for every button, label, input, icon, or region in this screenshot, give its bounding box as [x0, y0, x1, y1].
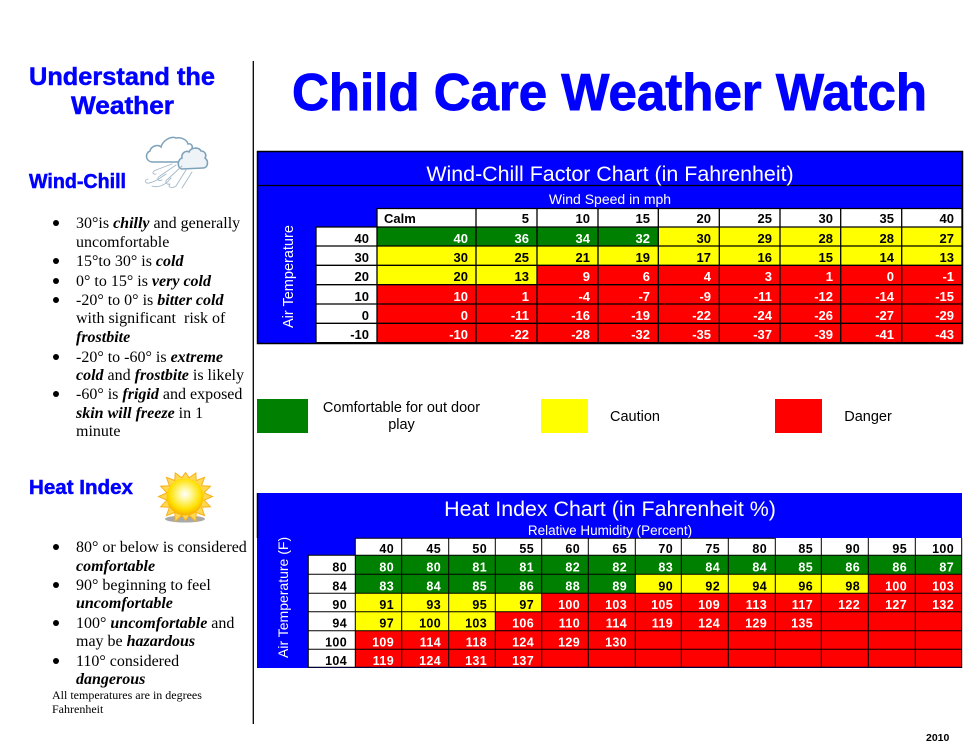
row 90: 93 [426, 598, 441, 612]
row 40: 30 [697, 231, 711, 246]
row 94: 119 [652, 616, 673, 630]
row 80: 80 [426, 560, 441, 574]
relative humidity header row: 85 [798, 542, 813, 556]
legend: comfortable: Comfortable for out door [323, 400, 480, 416]
legend: caution: Caution [610, 409, 660, 425]
wind speed header row: 35 [880, 211, 894, 226]
row 90: 132 [932, 598, 954, 612]
legend: danger [775, 399, 892, 433]
row 104: 137 [512, 654, 534, 668]
row 10: -4 [578, 289, 591, 304]
row 40: 34 [576, 231, 591, 246]
heat index bullet list: may be hazardous [76, 633, 195, 650]
air temperature axis label: Air Temperature [281, 225, 297, 328]
row 0: -29 [935, 308, 954, 323]
row 84: 88 [565, 580, 580, 594]
row 0: -16 [571, 308, 590, 323]
row 80: 86 [892, 560, 907, 574]
row 40: 28 [880, 231, 894, 246]
row 80: 82 [565, 560, 580, 574]
wind-chill bullet list: -20° to 0° is bitter cold [76, 292, 224, 309]
wind-chill bullet list: -20° to -60° is extreme [76, 349, 223, 366]
relative humidity header row: 70 [658, 542, 673, 556]
row 94: 110 [559, 616, 580, 630]
wind speed header row: 15 [636, 211, 650, 226]
row -10: -10 [350, 327, 369, 342]
wind speed header row [384, 211, 954, 226]
row 90: 109 [698, 598, 720, 612]
row 80: 80 [332, 560, 347, 574]
row -10: -41 [875, 327, 894, 342]
wind speed header row: 30 [819, 211, 833, 226]
row 0: -24 [753, 308, 773, 323]
row 20: 20 [454, 269, 468, 284]
cell backgrounds [308, 538, 962, 668]
row 20: -1 [942, 269, 954, 284]
row 90: 122 [838, 598, 860, 612]
icon: wind cloud [145, 137, 207, 188]
row 94 [332, 616, 813, 630]
relative humidity header row: 75 [705, 542, 720, 556]
row 94: 129 [745, 616, 767, 630]
row 0: 0 [362, 308, 369, 323]
row 20 [355, 269, 954, 284]
heat index bullet list: 80° or below is considered [76, 539, 247, 556]
row 100: 130 [605, 636, 627, 650]
row 30: 17 [697, 250, 711, 265]
year label: 2010 [926, 732, 950, 744]
wind-chill chart [258, 152, 962, 344]
relative humidity header row: 55 [519, 542, 534, 556]
sidebar heading [29, 63, 215, 120]
row -10: -22 [510, 327, 529, 342]
row 0 [362, 308, 954, 323]
heat index bullet list: 100° uncomfortable and [76, 615, 234, 632]
heat index bullet list: comfortable [76, 558, 155, 575]
wind speed header row: 10 [576, 211, 590, 226]
row 84: 83 [379, 580, 394, 594]
row 90: 105 [651, 598, 673, 612]
row -10: -39 [814, 327, 833, 342]
heat index bullet list: 90° beginning to feel [76, 577, 211, 594]
row 40: 40 [454, 231, 468, 246]
row 30: 30 [454, 250, 468, 265]
row 94: 124 [698, 616, 720, 630]
relative humidity header row: 45 [426, 542, 441, 556]
row 84: 103 [932, 580, 954, 594]
row 90: 95 [472, 598, 487, 612]
row 90: 97 [519, 598, 534, 612]
row 84: 90 [658, 580, 673, 594]
icon: sun [158, 472, 212, 522]
legend: caution [541, 399, 660, 433]
row 10: -12 [814, 289, 833, 304]
row 90: 103 [605, 598, 627, 612]
row 0: -27 [875, 308, 894, 323]
row 10: -15 [935, 289, 954, 304]
relative humidity header row: 100 [932, 542, 954, 556]
row 10: -14 [875, 289, 895, 304]
row 94: 100 [419, 616, 441, 630]
row 80: 84 [705, 560, 720, 574]
row 0: -26 [814, 308, 833, 323]
heat index heading: Heat Index [29, 477, 133, 499]
row 90: 117 [792, 598, 813, 612]
row 40: 40 [355, 231, 369, 246]
row 20: 1 [826, 269, 833, 284]
heat index bullet list: uncomfortable [76, 595, 173, 612]
relative humidity header row: 60 [565, 542, 580, 556]
wind speed header row: 40 [940, 211, 954, 226]
row 40: 27 [940, 231, 954, 246]
row 84: 100 [885, 580, 907, 594]
wind-chill bullet list: 30°is chilly and generally [76, 215, 240, 232]
row 20: 13 [515, 269, 529, 284]
row 84: 84 [332, 580, 347, 594]
wind-chill bullet list: 0° to 15° is very cold [76, 273, 212, 290]
row 80: 81 [472, 560, 487, 574]
row 104 [325, 654, 534, 668]
cell backgrounds [316, 208, 962, 343]
row 80: 85 [798, 560, 813, 574]
row 84: 94 [752, 580, 767, 594]
row 30: 25 [515, 250, 529, 265]
wind-chill bullet list: minute [76, 423, 120, 440]
row 10: 10 [355, 289, 369, 304]
wind-chill bullet list: -60° is frigid and exposed [76, 386, 242, 403]
footnote [52, 688, 202, 716]
relative humidity header row: 95 [892, 542, 907, 556]
wind speed header row: 25 [758, 211, 772, 226]
heat index chart title: Heat Index Chart (in Fahrenheit %) [444, 497, 776, 521]
row 100: 129 [558, 636, 580, 650]
air temperature axis label: Air Temperature (F) [275, 537, 291, 658]
wind speed header row: Calm [384, 211, 416, 226]
row 80: 83 [658, 560, 673, 574]
wind speed header row: 20 [697, 211, 711, 226]
row 10: 1 [522, 289, 529, 304]
row 104: 124 [419, 654, 441, 668]
heat index bullet list: 110° considered [76, 653, 179, 670]
row 0: -11 [511, 308, 529, 323]
footnote: All temperatures are in degrees [52, 688, 202, 702]
row 40: 28 [819, 231, 833, 246]
row 30: 30 [355, 250, 369, 265]
row 84: 89 [612, 580, 627, 594]
row 10: 10 [454, 289, 468, 304]
row 94: 135 [791, 616, 813, 630]
sidebar heading: Understand the [29, 63, 215, 91]
relative humidity axis label: Relative Humidity (Percent) [528, 523, 692, 538]
row 94: 114 [606, 616, 627, 630]
row 100: 124 [512, 636, 534, 650]
row 30: 15 [819, 250, 833, 265]
row 100: 118 [466, 636, 487, 650]
row -10 [350, 327, 954, 342]
row 90: 91 [379, 598, 394, 612]
row 0: -22 [692, 308, 711, 323]
row 84: 92 [705, 580, 720, 594]
sidebar heading: Weather [71, 92, 174, 120]
row 10: -9 [699, 289, 711, 304]
wind-chill bullet list [53, 215, 244, 440]
row 30: 14 [880, 250, 895, 265]
row 80: 84 [752, 560, 767, 574]
row 100 [325, 636, 627, 650]
row 100: 109 [372, 636, 394, 650]
row 84: 98 [845, 580, 860, 594]
row 30: 16 [758, 250, 772, 265]
relative humidity header row: 80 [752, 542, 767, 556]
row 94: 97 [379, 616, 394, 630]
wind-chill heading: Wind-Chill [29, 171, 126, 193]
wind-chill bullet list: frostbite [76, 329, 130, 346]
row 84 [332, 580, 954, 594]
row 10: -7 [638, 289, 650, 304]
row 30 [355, 250, 954, 265]
row 40: 36 [515, 231, 529, 246]
row 104: 104 [325, 654, 347, 668]
heat index chart [257, 493, 962, 668]
row 20: 0 [887, 269, 894, 284]
row 30: 19 [636, 250, 650, 265]
main title: Child Care Weather Watch [292, 64, 927, 122]
row 0: 0 [461, 308, 468, 323]
row 80: 82 [612, 560, 627, 574]
row -10: -32 [631, 327, 650, 342]
row 20: 6 [643, 269, 650, 284]
row 90: 90 [332, 598, 347, 612]
row 104: 131 [465, 654, 487, 668]
row 94: 94 [332, 616, 347, 630]
row 80: 80 [379, 560, 394, 574]
row 80: 86 [845, 560, 860, 574]
legend: comfortable: play [388, 417, 416, 433]
row 20: 3 [765, 269, 772, 284]
wind speed header row: 5 [522, 211, 529, 226]
row -10: -43 [935, 327, 954, 342]
row 80: 81 [519, 560, 534, 574]
relative humidity header row: 90 [845, 542, 860, 556]
row 94: 106 [512, 616, 534, 630]
row 80 [332, 560, 954, 574]
legend: comfortable [257, 399, 480, 433]
relative humidity header row: 65 [612, 542, 627, 556]
row 90: 127 [885, 598, 907, 612]
row 90: 113 [746, 598, 767, 612]
wind-chill bullet list: with significant risk of [76, 310, 226, 327]
row 90: 100 [558, 598, 580, 612]
row 100: 100 [325, 636, 347, 650]
row -10: -35 [692, 327, 711, 342]
row -10: -10 [449, 327, 468, 342]
row 40 [355, 231, 954, 246]
row 84: 84 [426, 580, 441, 594]
relative humidity header row [379, 542, 954, 556]
row 104: 119 [373, 654, 394, 668]
legend [257, 399, 892, 433]
wind-chill bullet list: 15°to 30° is cold [76, 253, 184, 270]
row 100: 114 [420, 636, 441, 650]
row 20: 9 [583, 269, 590, 284]
row 94: 103 [465, 616, 487, 630]
wind-chill chart title: Wind-Chill Factor Chart (in Fahrenheit) [426, 162, 794, 186]
wind-chill bullet list: skin will freeze in 1 [75, 405, 203, 422]
row 20: 4 [704, 269, 712, 284]
wind speed axis label: Wind Speed in mph [549, 191, 671, 207]
row 10: -11 [754, 289, 772, 304]
row 40: 29 [758, 231, 772, 246]
heat index bullet list: dangerous [76, 671, 145, 688]
relative humidity header row: 50 [472, 542, 487, 556]
relative humidity header row: 40 [379, 542, 394, 556]
wind-chill bullet list: uncomfortable [76, 234, 169, 251]
row 80: 87 [939, 560, 954, 574]
row 84: 86 [519, 580, 534, 594]
row 10 [355, 289, 954, 304]
row 40: 32 [636, 231, 650, 246]
wind-chill bullet list: cold and frostbite is likely [76, 367, 244, 384]
footnote: Fahrenheit [52, 702, 104, 716]
row 84: 85 [472, 580, 487, 594]
row 20: 20 [355, 269, 369, 284]
legend: danger: Danger [844, 409, 892, 425]
row 30: 13 [940, 250, 954, 265]
row 84: 96 [798, 580, 813, 594]
row 30: 21 [576, 250, 590, 265]
row -10: -28 [571, 327, 590, 342]
row 90 [332, 598, 954, 612]
heat index bullet list [53, 539, 247, 688]
row -10: -37 [753, 327, 772, 342]
row 0: -19 [631, 308, 650, 323]
